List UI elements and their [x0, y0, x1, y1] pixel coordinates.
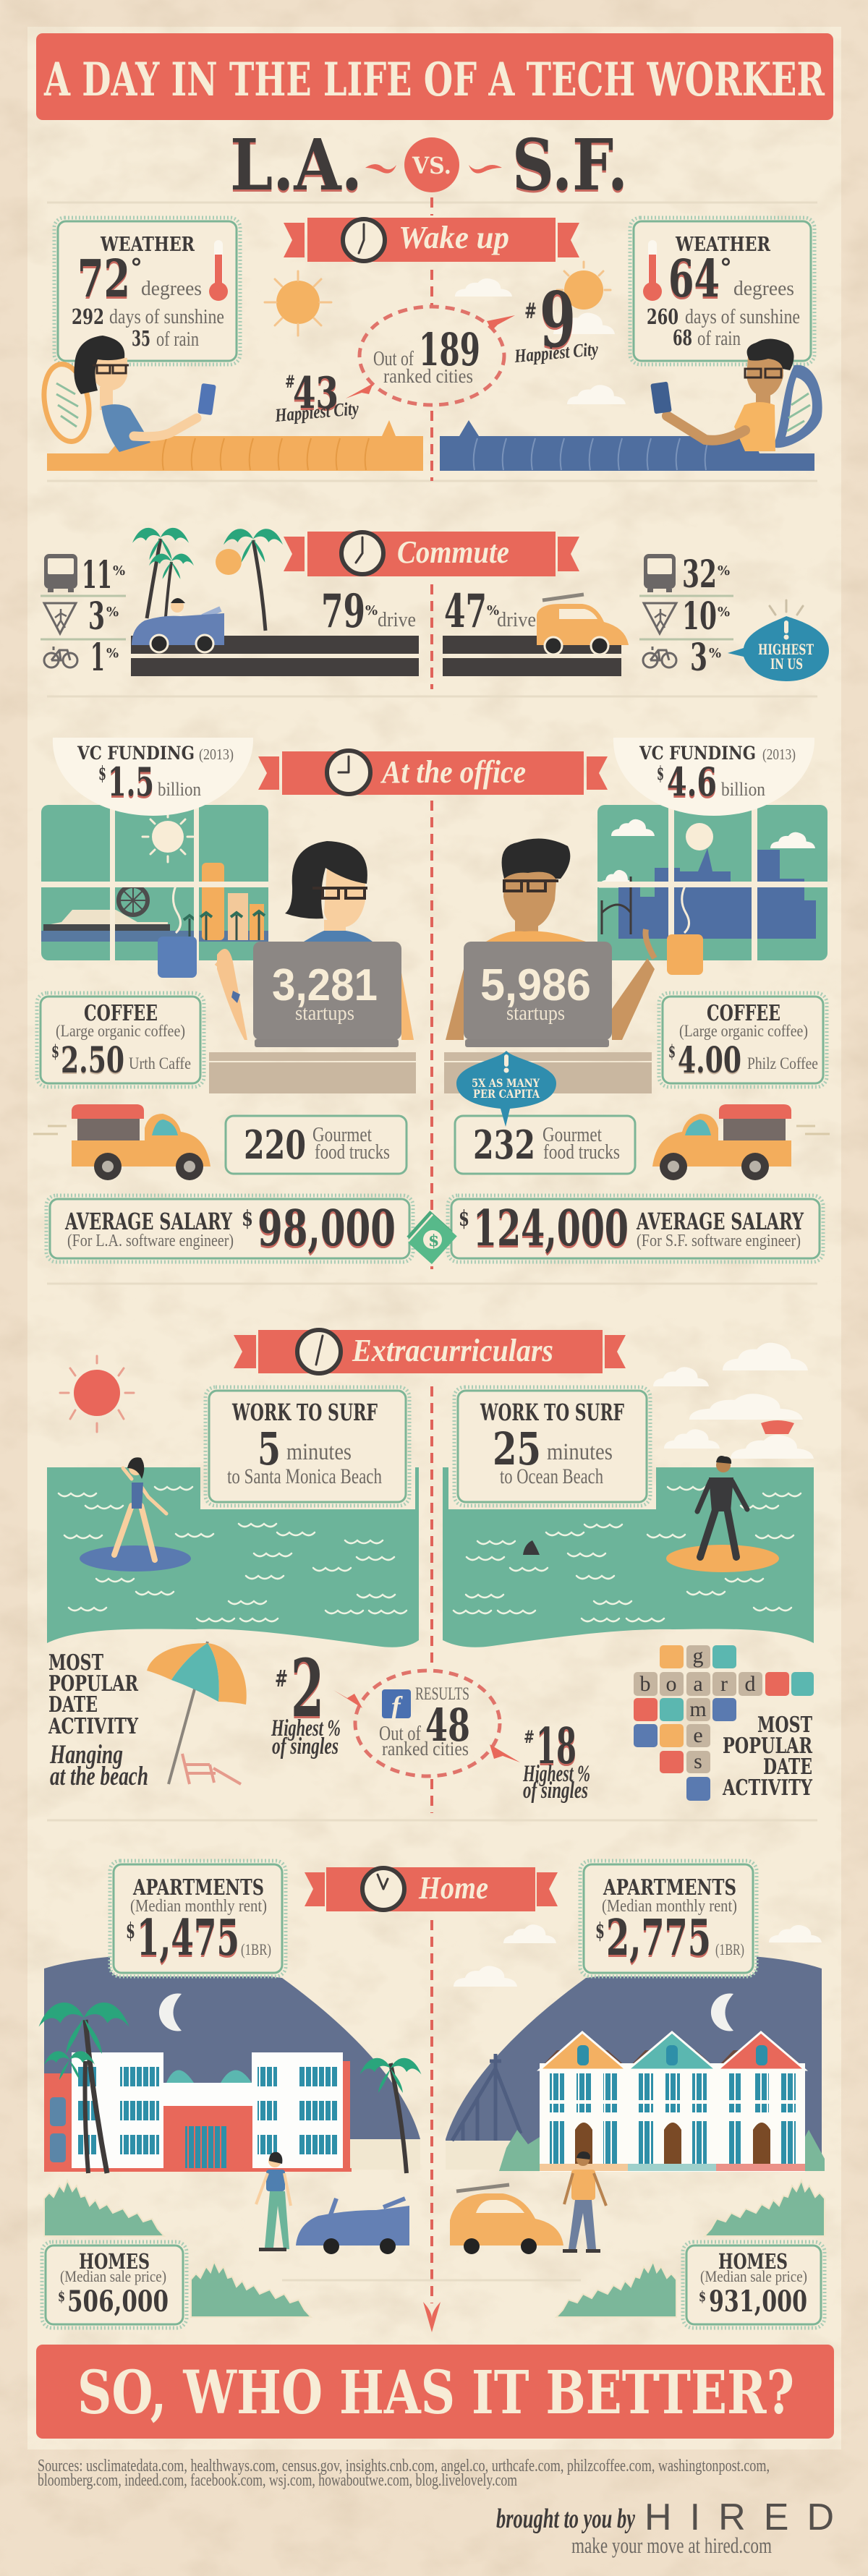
laptop: S.F. startups [464, 942, 612, 1047]
panel: S.F. food trucks: 232 [473, 1122, 535, 1168]
stat: S.F. happiest rank [513, 275, 599, 367]
panel: S.F. food trucks [455, 1116, 635, 1174]
heading: L.A. vs. S.F.: S.F. [512, 124, 628, 206]
panel: L.A. apartments: $ [126, 1919, 135, 1944]
panel: S.F. coffee: 4.00 [678, 1038, 741, 1081]
stat: S.F. highest singles: # [524, 1726, 535, 1747]
panel: L.A. weather: 72 [77, 248, 130, 309]
icon: home blue car [296, 2198, 409, 2254]
bubble: VC funding L.A.: billion [158, 779, 201, 800]
icon: L.A. moon [159, 1993, 182, 2031]
ribbon: extracurriculars: Extracurriculars [352, 1333, 553, 1368]
stat: L.A. highest singles: 2 [291, 1642, 324, 1735]
panel: S.F. weather: WEATHER [675, 234, 770, 256]
panel: L.A. homes: $ [58, 2287, 65, 2305]
credit: Hired: brought to you by [496, 2504, 635, 2534]
panel: S.F. apartments: $ [595, 1919, 605, 1944]
panel: L.A. homes [42, 2242, 187, 2328]
L.A. commute stats: % [106, 646, 119, 661]
S.F. commute stats: % [718, 605, 730, 620]
panel: L.A. coffee: COFFEE [84, 1001, 158, 1026]
stat: S.F. happiest rank: # [524, 299, 537, 324]
stat: 47% drive: drive [497, 609, 536, 631]
panel: L.A. coffee: 2.50 [61, 1038, 124, 1081]
text: S.F. date activity: DATE [763, 1754, 812, 1780]
S.F. commute stats: 10 [682, 594, 717, 639]
panel: S.F. apartments [580, 1861, 757, 1976]
text: L.A. date activity: ACTIVITY [48, 1714, 138, 1739]
L.A. commute stats: 1 [90, 636, 105, 680]
S.F. commute stats: % [709, 646, 721, 661]
bubble: VC funding S.F.: billion [721, 779, 765, 800]
icon: board games tiles: s [694, 1749, 702, 1773]
icon: money: $ [428, 1232, 439, 1250]
sky clouds and kite [653, 1343, 814, 1459]
L.A. commute stats: % [113, 563, 125, 579]
closing banner [36, 2345, 834, 2439]
ribbon: at the office [258, 751, 608, 795]
panel: L.A. salary: (For L.A. software engineer) [67, 1232, 234, 1250]
stat: S.F. highest singles: Highest % [522, 1761, 590, 1787]
panel: S.F. salary [448, 1195, 823, 1262]
text: L.A. date activity: at the beach [50, 1762, 148, 1791]
panel: S.F. weather: 260 [647, 304, 678, 329]
panel: L.A. salary: $ [242, 1206, 253, 1232]
panel: L.A. weather: degrees [141, 278, 202, 300]
panel: L.A. coffee: Urth Caffe [129, 1054, 191, 1072]
credit: Hired: make your move at hired.com [571, 2533, 772, 2558]
panel: S.F. weather [630, 218, 814, 364]
panel: S.F. coffee: Philz Coffee [747, 1054, 818, 1072]
panel: L.A. weather: WEATHER [100, 234, 195, 256]
icon: S.F. food truck [652, 1104, 830, 1180]
panel: S.F. weather: degrees [733, 278, 794, 300]
panel: L.A. weather: ° [130, 254, 142, 283]
panel: L.A. coffee [37, 993, 204, 1087]
icon: board games tiles: d [745, 1672, 755, 1696]
bubble: VC funding S.F.: 4.6 [667, 759, 717, 805]
ribbon: home: Home [418, 1870, 488, 1906]
panel: L.A. apartments: APARTMENTS [132, 1875, 264, 1901]
ocean: L.A. [47, 1467, 419, 1647]
panel: S.F. salary: 124,000 [473, 1200, 629, 1258]
arrow: down to conclusion [423, 2302, 441, 2332]
surfer: S.F. [666, 1456, 779, 1572]
bed: L.A. orange blanket [47, 420, 423, 471]
laptop: L.A. startups: 3,281 [272, 960, 378, 1010]
ocean: S.F. [443, 1467, 814, 1647]
character: man at laptop [446, 839, 703, 1040]
character: man in bed [650, 338, 822, 451]
panel: L.A. homes: (Median sale price) [60, 2267, 166, 2285]
text: L.A. date activity: MOST [48, 1650, 103, 1676]
panel: L.A. apartments: (Median monthly rent) [130, 1897, 267, 1916]
L.A. commute stats [41, 553, 126, 680]
happiest city ring [346, 307, 515, 405]
illustration: S.F. bridge and painted ladies [446, 2032, 825, 2172]
icon: L.A. sun [265, 271, 331, 336]
happiest city ring: 189 [419, 323, 480, 376]
icon: S.F. moon [711, 1994, 733, 2031]
panel: S.F. work to surf: minutes [547, 1439, 613, 1465]
panel: L.A. salary: AVERAGE SALARY [64, 1208, 233, 1235]
panel: L.A. food trucks: food trucks [315, 1140, 390, 1164]
stat: L.A. highest singles [271, 1642, 341, 1760]
credit: Hired [496, 2496, 834, 2558]
panel: S.F. coffee: $ [668, 1041, 676, 1062]
callout: highest in US: IN US [770, 655, 803, 673]
panel: S.F. homes [683, 2242, 825, 2328]
icon: board games tiles: m [689, 1697, 707, 1721]
text: L.A. date activity: DATE [48, 1692, 98, 1718]
panel: S.F. weather: 68 [673, 325, 692, 350]
facebook results ring: Out of [379, 1723, 422, 1745]
panel: L.A. weather: 292 [72, 304, 104, 329]
panel: L.A. coffee: $ [51, 1041, 59, 1062]
laptop: L.A. startups [253, 942, 401, 1047]
laptop: L.A. startups: startups [295, 1002, 354, 1025]
panel: L.A. work to surf: WORK TO SURF [231, 1399, 378, 1426]
stat: 79% drive: drive [378, 609, 416, 631]
stat: S.F. happiest rank: 9 [540, 275, 576, 364]
panel: S.F. homes: HOMES [718, 2249, 788, 2274]
panel: S.F. coffee: (Large organic coffee) [679, 1022, 808, 1040]
happiest city ring: Out of [373, 348, 414, 370]
ribbon: wake up [284, 218, 579, 262]
icon: board games tiles: o [665, 1672, 677, 1696]
panel: S.F. weather: of rain [697, 328, 741, 350]
panel: L.A. apartments [110, 1861, 286, 1976]
bed: S.F. blue blanket [440, 420, 814, 471]
S.F. commute stats [639, 553, 733, 680]
stat: L.A. highest singles: # [275, 1665, 288, 1692]
icon: S.F. orange car [537, 594, 629, 654]
panel: L.A. work to surf: minutes [286, 1439, 352, 1465]
ribbon: wake up: Wake up [399, 220, 509, 255]
icon: board games tiles: g [693, 1644, 703, 1668]
panel: S.F. food trucks: food trucks [543, 1140, 620, 1164]
panel: S.F. weather: ° [720, 254, 732, 283]
bubble: VC funding L.A. [53, 738, 253, 816]
panel: S.F. work to surf [454, 1387, 650, 1506]
S.F. commute stats: 32 [682, 553, 717, 597]
callout: 5x as many per capita: PER CAPITA [473, 1087, 540, 1101]
icon: board games tiles [634, 1644, 814, 1801]
panel: S.F. work to surf: to Ocean Beach [500, 1464, 603, 1488]
callout: 5x as many per capita: 5X AS MANY [472, 1076, 540, 1090]
icon: board games tiles: a [693, 1672, 703, 1696]
panel: L.A. apartments: 1,475 [137, 1909, 239, 1967]
panel: L.A. homes: 506,000 [67, 2285, 169, 2319]
panel: L.A. weather [54, 218, 240, 364]
panel: S.F. homes: $ [699, 2287, 706, 2305]
panel: S.F. weather: days of sunshine [685, 306, 800, 328]
stat: 79% drive [321, 584, 416, 639]
sources: bloomberg.com, indeed.com, facebook.com, wsj.com, howaboutwe.com, blog.livelovely.com [38, 2471, 517, 2490]
S.F. commute stats: % [718, 563, 730, 579]
laptop: S.F. startups: 5,986 [480, 960, 591, 1010]
callout: highest in US: HIGHEST [758, 641, 814, 658]
callout: highest in US [728, 600, 829, 681]
panel: L.A. apartments: (1BR) [241, 1940, 271, 1958]
facebook results ring: 48 [425, 1699, 470, 1752]
ribbon: at the office: At the office [380, 754, 526, 790]
stat: 47% drive: % [487, 603, 499, 618]
stat: S.F. highest singles: of singles [523, 1778, 588, 1804]
ribbon: commute: Commute [397, 534, 509, 570]
stat: L.A. happiest rank: 43 [293, 368, 339, 419]
icon: S.F. sun and clouds [455, 262, 626, 404]
bubble: VC funding L.A.: (2013) [199, 746, 234, 763]
stat: L.A. happiest rank: # [285, 371, 295, 392]
icon: beach umbrella [147, 1642, 247, 1784]
desk: L.A. [209, 1052, 416, 1093]
panel: S.F. work to surf: 25 [493, 1423, 541, 1475]
callout: 5x as many per capita [456, 1051, 556, 1127]
text: L.A. date activity: POPULAR [48, 1671, 139, 1697]
bubble: VC funding L.A.: 1.5 [108, 759, 154, 805]
panel: S.F. apartments: APARTMENTS [603, 1875, 736, 1901]
text: S.F. date activity: POPULAR [723, 1733, 813, 1759]
icon: L.A. food truck [33, 1104, 210, 1180]
road: S.F. [443, 636, 621, 676]
stat: 47% drive: 47 [444, 584, 487, 639]
character: woman at laptop [158, 841, 414, 1040]
panel: L.A. coffee: (Large organic coffee) [56, 1022, 185, 1040]
icon: home orange car [450, 2185, 563, 2254]
panel: L.A. salary [46, 1195, 413, 1262]
icon: red sun [60, 1356, 134, 1432]
facebook results ring: RESULTS [415, 1684, 469, 1704]
panel: L.A. salary: 98,000 [258, 1200, 396, 1258]
icon: board games tiles: e [693, 1723, 703, 1747]
panel: S.F. apartments: (1BR) [715, 1940, 744, 1958]
icon: L.A. blue car [132, 598, 224, 652]
panel: S.F. apartments: (Median monthly rent) [602, 1897, 737, 1916]
stat: L.A. highest singles: of singles [272, 1733, 339, 1760]
text: S.F. date activity: ACTIVITY [722, 1775, 812, 1801]
icon: board games tiles: b [639, 1672, 651, 1696]
stat: 79% drive: 79 [321, 584, 365, 639]
surfer: L.A. [80, 1457, 191, 1571]
ribbon: extracurriculars [234, 1330, 626, 1373]
S.F. commute stats: 3 [690, 636, 707, 680]
waves [59, 1487, 801, 1621]
panel: L.A. food trucks: 220 [244, 1122, 306, 1168]
home clouds [454, 1924, 822, 1987]
sky: S.F. night [446, 1956, 822, 2170]
happiest city ring: ranked cities [383, 365, 473, 387]
icon: money [407, 1211, 457, 1264]
stat: L.A. happiest rank [273, 368, 359, 426]
laptop: S.F. startups: startups [506, 1002, 565, 1025]
L.A. commute stats: 11 [82, 553, 112, 597]
bubble: VC funding L.A.: VC FUNDING [77, 743, 195, 764]
panel: L.A. weather: days of sunshine [109, 306, 224, 328]
bubble: VC funding S.F. [613, 738, 814, 816]
desk: S.F. [444, 1052, 652, 1093]
text: S.F. date activity [722, 1713, 813, 1801]
text: S.F. date activity: MOST [757, 1713, 812, 1738]
panel: L.A. food trucks: Gourmet [312, 1123, 372, 1146]
panel: S.F. coffee: COFFEE [707, 1001, 780, 1026]
stat: L.A. highest singles: Highest % [271, 1715, 341, 1741]
stat: 79% drive: % [365, 603, 378, 618]
panel: S.F. homes: (Median sale price) [700, 2267, 807, 2285]
panel: S.F. coffee [659, 993, 827, 1087]
facebook results ring: ranked cities [382, 1738, 469, 1760]
bubble: VC funding S.F.: (2013) [762, 746, 796, 763]
panel: L.A. work to surf [205, 1387, 409, 1506]
panel: L.A. food trucks [226, 1116, 407, 1174]
panel: L.A. weather: 35 [132, 326, 150, 351]
sky: L.A. night [44, 1956, 420, 2170]
panel: S.F. weather: 64 [668, 248, 720, 309]
credit: Hired: HIRED [644, 2496, 834, 2538]
panel: L.A. work to surf: 5 [258, 1423, 281, 1475]
icon: palm trees and sun [132, 528, 283, 631]
sources [38, 2457, 770, 2490]
window: L.A. pier view [41, 805, 268, 960]
bubble: VC funding S.F.: $ [657, 763, 664, 785]
stat: S.F. highest singles: 18 [536, 1718, 576, 1775]
bushes [44, 2180, 825, 2317]
panel: S.F. work to surf: WORK TO SURF [480, 1399, 624, 1426]
stat: S.F. happiest rank: Happiest City [513, 338, 599, 367]
text: L.A. date activity [48, 1650, 148, 1791]
L.A. commute stats: % [106, 605, 119, 620]
panel: S.F. salary: $ [459, 1206, 469, 1232]
facebook results ring [333, 1671, 520, 1776]
person: S.F. man [563, 2151, 606, 2253]
panel: L.A. homes: HOMES [79, 2249, 150, 2274]
facebook results ring: f [391, 1692, 403, 1722]
bubble: VC funding S.F.: VC FUNDING [639, 743, 756, 764]
illustration: L.A. apartments [39, 2003, 421, 2173]
panel: S.F. salary: AVERAGE SALARY [636, 1208, 804, 1235]
ribbon: commute [284, 532, 579, 576]
heading: L.A. vs. S.F.: VS. [412, 152, 451, 179]
panel: L.A. weather: of rain [156, 328, 199, 351]
heading: L.A. vs. S.F. [230, 124, 628, 206]
ribbon: home [305, 1867, 558, 1911]
stat: S.F. highest singles [522, 1718, 590, 1804]
road: L.A. [131, 636, 419, 676]
stat: L.A. happiest rank: Happiest City [273, 398, 359, 426]
icon: shark fin [523, 1540, 540, 1555]
window: S.F. skyline view [597, 805, 827, 960]
heading: L.A. vs. S.F.: L.A. [230, 124, 362, 206]
text: L.A. date activity: Hanging [49, 1740, 123, 1770]
bubble: VC funding L.A.: $ [98, 763, 106, 785]
panel: S.F. apartments: 2,775 [606, 1909, 711, 1967]
icon: board games tiles: r [720, 1672, 728, 1696]
L.A. commute stats: 3 [88, 594, 105, 639]
title banner [36, 33, 833, 120]
panel: S.F. homes: 931,000 [709, 2285, 807, 2319]
character: woman in bed [38, 336, 216, 452]
panel: L.A. work to surf: to Santa Monica Beach [227, 1464, 382, 1488]
panel: S.F. salary: (For S.F. software engineer) [637, 1232, 801, 1250]
panel: S.F. food trucks: Gourmet [542, 1123, 602, 1146]
person: L.A. woman [256, 2152, 291, 2251]
